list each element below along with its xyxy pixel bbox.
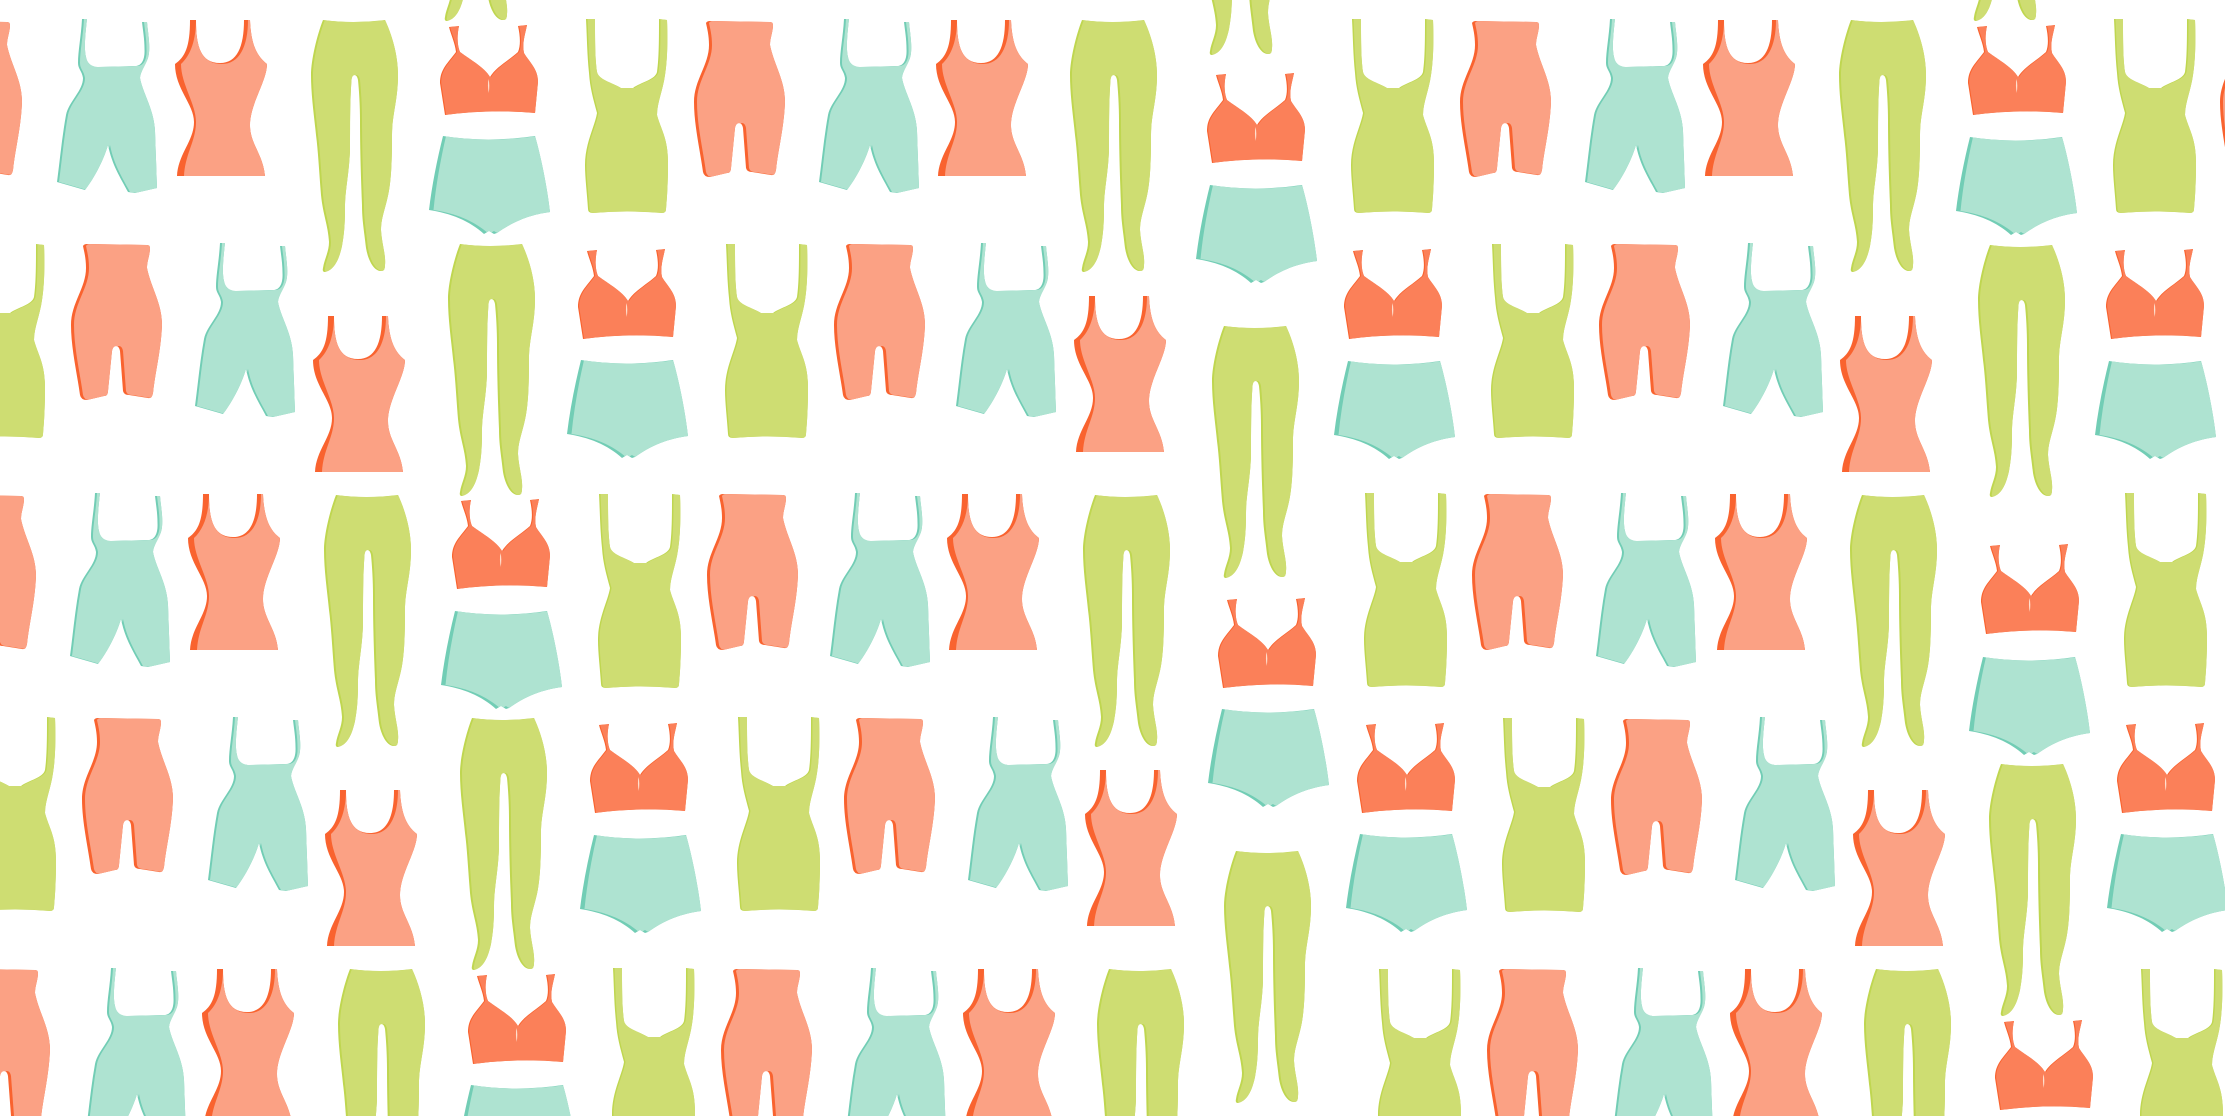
- row 4: shorts 3: [1611, 719, 1705, 875]
- row 3: shorts 3: [1472, 494, 1566, 650]
- row 3: tank 3: [1715, 494, 1807, 650]
- row 3: bodysuit 2: [830, 493, 932, 667]
- row 1: bodysuit: [57, 19, 159, 193]
- row 1: bra: [440, 25, 539, 115]
- row 1: shorts 4: [2220, 21, 2225, 177]
- row 3: shorts: [0, 495, 39, 651]
- row 3: briefs 3: [1969, 657, 2095, 755]
- leggings cut at top edge 2: [1198, 0, 1287, 55]
- row 3: shorts 2: [707, 494, 801, 650]
- row 1: briefs 3: [1956, 137, 2082, 235]
- row 5: bra 2: [1995, 1020, 2094, 1110]
- row 1: bra 2: [1207, 73, 1306, 163]
- row 1: bodysuit 2: [819, 19, 921, 193]
- row 5: dress 3: [2140, 969, 2224, 1116]
- row 2: bodysuit: [195, 243, 297, 417]
- row 4: leggings 3: [1989, 764, 2078, 1016]
- row 1: dress 2: [1351, 19, 1436, 213]
- leggings cut at top edge: [433, 0, 522, 21]
- row 2: tank 3: [1840, 316, 1932, 472]
- row 4: tank 3: [1853, 790, 1945, 946]
- row 2: tank: [313, 316, 405, 472]
- row 3: briefs 2: [1208, 709, 1334, 807]
- row 2: bodysuit 2: [956, 243, 1058, 417]
- row 1: bra 3: [1968, 25, 2067, 115]
- row 4: bra 2: [1357, 723, 1456, 813]
- row 1: dress: [585, 19, 670, 213]
- row 4: leggings 2: [1224, 851, 1313, 1103]
- row 3: bodysuit: [70, 493, 172, 667]
- row 5: shorts: [0, 969, 53, 1116]
- row 3: tank: [188, 494, 280, 650]
- row 2: leggings 2: [1212, 326, 1301, 578]
- row 2: shorts: [71, 244, 165, 400]
- row 5: leggings 3: [1864, 969, 1953, 1116]
- row 5: shorts 3: [1487, 969, 1581, 1116]
- row 4: bra: [590, 723, 689, 813]
- row 5: bodysuit: [86, 968, 188, 1116]
- row 1: shorts: [0, 21, 25, 177]
- row 2: leggings: [448, 244, 537, 496]
- row 4: bodysuit 3: [1735, 717, 1837, 891]
- row 5: bra: [468, 974, 567, 1064]
- row 1: leggings 2: [1070, 20, 1159, 272]
- row 2: leggings 3: [1978, 245, 2067, 497]
- row 2: bodysuit 3: [1723, 243, 1825, 417]
- row 3: leggings 3: [1850, 495, 1939, 747]
- row 4: briefs: [580, 835, 706, 933]
- row 4: bodysuit 2: [968, 717, 1070, 891]
- row 2: tank 2: [1074, 296, 1166, 452]
- row 3: leggings: [324, 495, 413, 747]
- row 2: dress 2: [725, 244, 810, 438]
- row 3: bodysuit 3: [1596, 493, 1698, 667]
- row 5: bodysuit 2: [846, 968, 948, 1116]
- row 1: tank 3: [1703, 20, 1795, 176]
- row 3: leggings 2: [1083, 495, 1172, 747]
- row 4: tank: [325, 790, 417, 946]
- row 5: dress: [612, 968, 696, 1116]
- row 1: tank: [175, 20, 267, 176]
- row 3: bra: [452, 499, 551, 589]
- leggings cut at top edge 3: [1962, 0, 2051, 21]
- row 2: briefs: [567, 360, 693, 458]
- row 1: dress 3: [2113, 19, 2198, 213]
- row 4: shorts: [82, 718, 176, 874]
- row 1: leggings: [311, 20, 400, 272]
- row 2: briefs 3: [2095, 361, 2221, 459]
- row 4: briefs 2: [1346, 834, 1472, 932]
- row 4: dress 2: [737, 717, 822, 911]
- row 5: tank 3: [1730, 969, 1822, 1116]
- row 4: briefs 3: [2107, 834, 2225, 932]
- row 2: dress 3: [1491, 244, 1576, 438]
- row 4: dress 3: [1502, 718, 1586, 912]
- row 5: leggings 2: [1097, 969, 1186, 1116]
- row 1: briefs 2: [1196, 185, 1322, 283]
- row 3: briefs: [441, 611, 567, 709]
- row 4: dress: [0, 717, 58, 911]
- row 2: bra 3: [2106, 249, 2205, 339]
- row 3: dress 2: [1364, 493, 1448, 687]
- row 3: dress: [598, 494, 682, 688]
- row 4: tank 2: [1085, 770, 1177, 926]
- row 2: briefs 2: [1334, 361, 1460, 459]
- row 1: shorts 3: [1460, 21, 1554, 177]
- row 1: leggings 3: [1839, 20, 1928, 272]
- row 2: bra: [578, 249, 677, 339]
- row 3: bra 3: [1981, 544, 2080, 634]
- row 4: shorts 2: [844, 718, 938, 874]
- row 2: dress: [0, 244, 46, 438]
- row 2: shorts 3: [1599, 244, 1693, 400]
- row 1: bodysuit 3: [1585, 19, 1687, 193]
- row 5: tank 2: [963, 969, 1055, 1116]
- row 4: leggings: [460, 718, 549, 970]
- row 2: shorts 2: [834, 244, 928, 400]
- row 4: bra 3: [2117, 723, 2216, 813]
- row 4: bodysuit: [208, 717, 310, 891]
- row 5: leggings: [338, 969, 427, 1116]
- row 3: tank 2: [947, 494, 1039, 650]
- row 1: briefs: [429, 136, 555, 234]
- row 5: tank: [202, 969, 294, 1116]
- row 3: dress 3: [2124, 493, 2208, 687]
- row 5: briefs: [457, 1085, 583, 1116]
- row 5: dress 2: [1378, 969, 1462, 1116]
- row 1: shorts 2: [694, 21, 788, 177]
- row 2: bra 2: [1344, 249, 1443, 339]
- row 3: bra 2: [1218, 598, 1317, 688]
- row 5: bodysuit 3: [1613, 968, 1715, 1116]
- row 1: tank 2: [936, 20, 1028, 176]
- row 5: shorts 2: [721, 969, 815, 1116]
